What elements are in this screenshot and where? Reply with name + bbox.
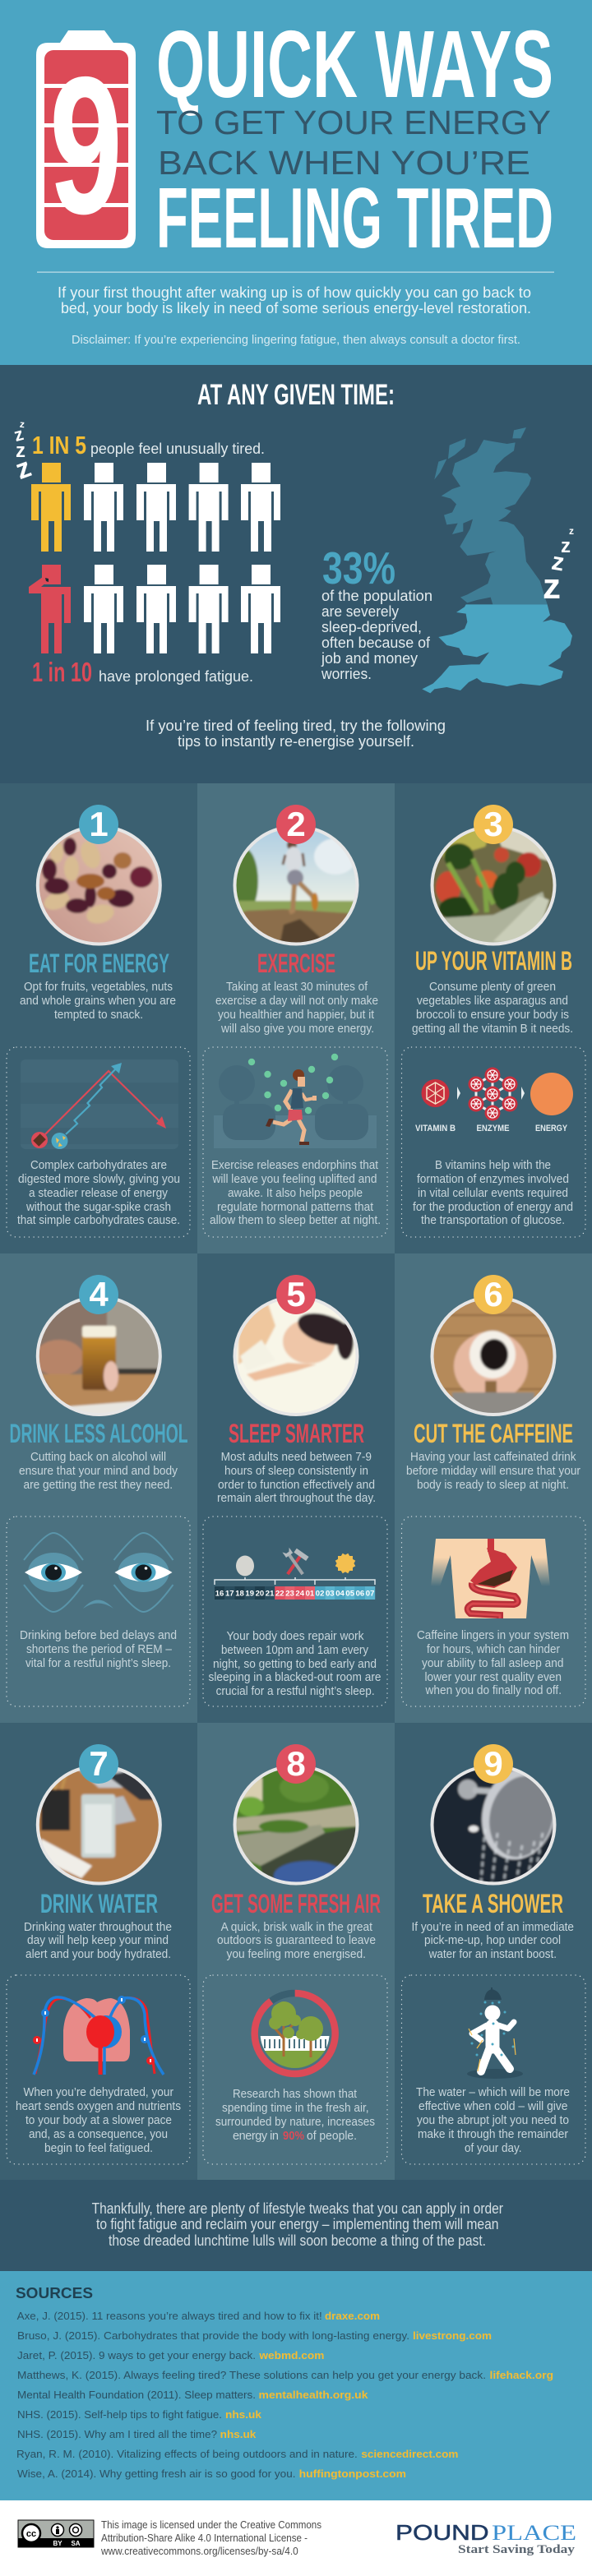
text: 33 percent: of the population — [321, 588, 432, 604]
photo: runner on a path — [237, 831, 355, 942]
text: explanation: begin to feel fatigued. — [44, 2142, 153, 2155]
panel: nature statistic box — [203, 1975, 387, 2164]
photo: glass of beer — [39, 1301, 159, 1413]
text: explanation: allow them to sleep better at night. — [210, 1214, 381, 1227]
map: United Kingdom — [422, 427, 572, 693]
text: description: Cutting back on alcohol will — [30, 1451, 166, 1464]
panel: cold water box — [401, 1975, 585, 2164]
panel: footer — [0, 2500, 592, 2576]
heading: SOURCES — [16, 2285, 93, 2301]
text: explanation: of your day. — [465, 2142, 521, 2155]
badge: 3 — [474, 805, 513, 844]
text: description — [20, 981, 176, 1022]
text: explanation — [209, 1630, 382, 1698]
badge: 6 — [474, 1275, 513, 1314]
text: explanation: when you do finally nod off. — [425, 1684, 562, 1697]
chart: sleep hours timeline: 18 — [235, 1590, 244, 1598]
icon: sleeping zzz map: z — [543, 566, 561, 607]
diagram: vitamin b enzyme energy — [415, 1067, 573, 1133]
text: description: and whole grains when you are — [20, 995, 176, 1008]
text: explanation: for hours, which can hinder — [427, 1643, 560, 1656]
badge: 4: 4 — [89, 1275, 109, 1313]
text: explanation — [16, 2086, 181, 2155]
panel: caffeine digestion box — [401, 1517, 585, 1706]
text: explanation: Drinking before bed delays and — [20, 1629, 177, 1642]
text: explanation: lower your rest quality even — [424, 1671, 562, 1684]
text: disclaimer: Disclaimer: If you’re experiencing lingering fatigue, then always consult a doctor first. — [72, 333, 520, 347]
text: explanation — [416, 2086, 570, 2155]
chart: sleep hours timeline: 20 — [256, 1590, 264, 1598]
chart: sleep hours timeline: 21 — [266, 1590, 275, 1598]
icon: sleeping zzz left: z — [19, 418, 25, 430]
text: source list: nhs.uk — [220, 2428, 257, 2440]
heading: SLEEP SMARTER — [229, 1419, 364, 1448]
text: licence: www.creativecommons.org/licenses/by-sa/4.0 — [100, 2546, 298, 2557]
text: source list: lifehack.org — [490, 2369, 553, 2381]
photo: glass of water on a desk — [39, 1770, 159, 1882]
text: description: pick-me-up, hop under cool — [424, 1934, 561, 1947]
panel: sleep timeline box — [203, 1517, 387, 1706]
chart: sleep hours timeline: 01 — [306, 1590, 315, 1598]
text: explanation: Caffeine lingers in your system — [417, 1629, 569, 1642]
text: explanation: Research has shown that — [233, 2088, 357, 2101]
text: description: alert and your body hydrated. — [25, 1948, 171, 1961]
text: explanation: sleeping in a blacked-out room are — [209, 1671, 382, 1684]
photo: woman sleeping — [237, 1302, 355, 1413]
text: source list: livestrong.com — [413, 2329, 492, 2342]
text: explanation: heart sends oxygen and nutrients — [16, 2100, 181, 2113]
text: description: order to function effectively and — [218, 1479, 375, 1492]
badge: 7: 7 — [89, 1744, 109, 1783]
text: explanation: your ability to fall asleep and — [422, 1657, 564, 1670]
title: TO GET YOUR ENERGY — [156, 104, 551, 141]
text: explanation: of people. — [307, 2130, 357, 2143]
icon: sleeping zzz left: z — [12, 451, 35, 486]
text: introduction: If your first thought after waking up is of how quickly you can go back to — [58, 284, 531, 301]
icon: battery with number 9: 9 — [49, 37, 123, 255]
text: description — [215, 981, 378, 1036]
title: BACK WHEN YOU’RE — [158, 144, 530, 182]
text: explanation: spending time in the fresh air, — [222, 2102, 369, 2115]
logo: poundplace: POUND — [395, 2520, 489, 2545]
chart: sleep hours timeline: 22 — [275, 1590, 284, 1598]
title — [156, 11, 553, 266]
text: source list: Wise, A. (2014). Why getting fresh air is so good for you. — [17, 2468, 296, 2480]
text: explanation: vital for a restful night’s sleep. — [25, 1657, 171, 1670]
panel: tip 3 vitamin b — [395, 783, 592, 1253]
icon: sleeping zzz map — [543, 525, 574, 607]
icon: shivering man in shower — [467, 1987, 523, 2079]
text: explanation: When you’re dehydrated, your — [23, 2086, 173, 2099]
text: description — [19, 1451, 178, 1492]
panel: tip 7 drink water — [0, 1723, 197, 2180]
text: explanation: will leave you feeling uplifted and — [212, 1173, 377, 1186]
icon: battery with number 9 — [36, 30, 136, 255]
heading: EAT FOR ENERGY — [29, 949, 169, 978]
text: source list: draxe.com — [325, 2310, 380, 2322]
text: explanation — [417, 1629, 569, 1697]
text: description: water for an instant boost. — [428, 1948, 557, 1961]
panel: tip 2 exercise — [197, 783, 395, 1253]
text: 33 percent: sleep-deprived, — [321, 619, 422, 635]
chart: sleep hours timeline: 23 — [285, 1590, 294, 1598]
panel: endorphins box — [203, 1047, 387, 1237]
heading: DRINK WATER — [40, 1889, 158, 1918]
text: explanation: effective when cold – will give — [419, 2100, 567, 2113]
icon: sleeping zzz left — [12, 418, 35, 486]
text: closing paragraph — [92, 2200, 503, 2249]
text: description — [217, 1451, 376, 1505]
icon: sleeping zzz left: z — [16, 440, 25, 462]
chart: sleep hours timeline — [215, 1548, 375, 1600]
text: explanation: for the production of energy and — [413, 1201, 573, 1214]
logo: poundplace: PLACE — [492, 2521, 576, 2545]
chart: sugar spike versus steady energy — [21, 1059, 178, 1149]
text: description: before midday will ensure that your — [406, 1465, 580, 1478]
chart: ninety percent donut with trees — [255, 1993, 335, 2075]
text: description: are getting the rest they need. — [23, 1479, 173, 1492]
text: description — [217, 1921, 376, 1961]
text: 1 in 10: have prolonged fatigue. — [99, 668, 253, 685]
text: description: body is ready to sleep at night. — [417, 1479, 569, 1492]
panel: tip 1 eat for energy — [0, 783, 197, 1253]
text: source list: Bruso, J. (2015). Carbohydrates that provide the body with long-lasting energy. — [17, 2329, 409, 2342]
text: source list: Axe, J. (2015). 11 reasons you’re always tired and how to fix it! — [17, 2310, 322, 2322]
text: description: remain alert throughout the day. — [217, 1492, 376, 1505]
text: explanation: make it through the remainder — [418, 2128, 568, 2141]
text: description: Taking at least 30 minutes of — [226, 981, 368, 994]
text: tips intro — [146, 718, 446, 750]
text: explanation: a steadier release of energy — [29, 1187, 169, 1200]
text: description: day will help keep your mind — [27, 1934, 169, 1947]
text: description: hours of sleep consistently in — [224, 1465, 368, 1478]
text: source list: Matthews, K. (2015). Always feeling tired? These solutions can help you get your energy back. — [17, 2369, 486, 2381]
badge: 4 — [79, 1275, 118, 1314]
photo: vegetable salad bowl — [434, 831, 553, 942]
badge: 6: 6 — [483, 1275, 503, 1313]
badge: 5: 5 — [286, 1275, 306, 1313]
text: description: Most adults need between 7-9 — [221, 1451, 372, 1464]
text: 1 in 5: 1 IN 5 — [32, 431, 86, 459]
text: introduction — [58, 284, 531, 316]
text: description: tempted to snack. — [54, 1009, 143, 1022]
text: explanation: The water – which will be more — [416, 2086, 570, 2099]
badge: 8 — [276, 1744, 316, 1784]
text: explanation: Exercise releases endorphins that — [211, 1159, 378, 1172]
chart: sleep hours timeline: 03 — [326, 1590, 335, 1598]
photo: nuts and dried fruit — [39, 830, 159, 942]
panel: sources — [0, 2271, 592, 2500]
diagram: vitamin b enzyme energy: ENERGY — [535, 1124, 568, 1133]
text: source list — [16, 2310, 553, 2480]
text: description — [411, 1921, 574, 1961]
text: explanation: to your body at a slower pace — [25, 2114, 172, 2127]
text: explanation: that simple carbohydrates cause. — [17, 1214, 180, 1227]
text: introduction: bed, your body is likely in need of some serious energy-level restoration. — [61, 300, 531, 316]
badge: 8: 8 — [286, 1744, 306, 1783]
text: explanation: the transportation of glucose. — [421, 1214, 565, 1227]
heading: DRINK LESS ALCOHOL — [10, 1419, 188, 1448]
text: closing paragraph: Thankfully, there are plenty of lifestyle tweaks that you can apply in order — [92, 2200, 503, 2217]
chart: sleep hours timeline: 06 — [356, 1590, 364, 1598]
icon: stomach and intestines — [431, 1539, 550, 1618]
text: description — [412, 981, 573, 1036]
icon: creative commons badge: SA — [71, 2540, 81, 2547]
icon: sleeping zzz map: z — [549, 548, 567, 577]
heading: EXERCISE — [257, 949, 335, 978]
badge: 7 — [79, 1744, 118, 1784]
diagram: vitamin b enzyme energy: ENZYME — [477, 1124, 510, 1133]
text: description: Opt for fruits, vegetables, nuts — [24, 981, 173, 994]
text: description: If you’re in need of an immediate — [411, 1921, 574, 1934]
panel: tip 5 sleep smarter — [197, 1253, 395, 1723]
text: closing paragraph: those dreaded lunchtime lulls will soon become a thing of the past. — [109, 2232, 486, 2249]
badge: 2: 2 — [286, 805, 306, 843]
chart: people row one in ten — [29, 565, 280, 653]
text: explanation — [413, 1159, 573, 1227]
chart: people row one in five — [31, 463, 280, 552]
panel: tip 9 take a shower — [395, 1723, 592, 2180]
chart: sleep hours timeline: 19 — [245, 1590, 254, 1598]
text: explanation — [17, 1159, 180, 1227]
icon: sleeping zzz left: z — [12, 423, 25, 445]
panel: alcohol and sleep box — [7, 1517, 190, 1706]
logo: poundplace: Start Saving Today — [458, 2543, 576, 2556]
text: tips intro: tips to instantly re-energise yourself. — [178, 733, 414, 750]
icon: sleeping zzz map: z — [561, 535, 571, 557]
badge: 9 — [474, 1744, 513, 1784]
text: explanation — [210, 1159, 381, 1227]
badge: 1 — [79, 805, 118, 844]
text: source list: sciencedirect.com — [361, 2448, 458, 2460]
text: source list: huffingtonpost.com — [299, 2468, 406, 2480]
chart: sleep hours timeline: 05 — [345, 1590, 355, 1598]
text: 33 percent: often because of — [321, 635, 431, 651]
text: source list: NHS. (2015). Self-help tips to fight fatigue. — [17, 2408, 222, 2421]
text: source list: webmd.com — [258, 2349, 324, 2361]
text: source list: NHS. (2015). Why am I tired all the time? — [17, 2428, 217, 2440]
logo: poundplace — [395, 2520, 576, 2556]
panel: vitamin to energy box — [401, 1047, 585, 1237]
icon: runner with endorphins — [214, 1054, 377, 1148]
text: explanation — [215, 2088, 375, 2143]
text: source list: nhs.uk — [225, 2408, 262, 2421]
chart: sleep hours timeline: 07 — [366, 1590, 374, 1598]
heading: AT ANY GIVEN TIME: — [197, 379, 395, 411]
text: explanation: awake. It also helps people — [228, 1187, 363, 1200]
icon: creative commons badge: BY — [53, 2540, 62, 2547]
badge: 1: 1 — [89, 805, 109, 843]
text: 33 percent: are severely — [321, 603, 399, 620]
text: description: you feeling more energised. — [227, 1948, 366, 1961]
text: 1 in 5 — [32, 431, 265, 459]
text: explanation: regulate hormonal patterns that — [217, 1201, 373, 1214]
text: licence: Attribution-Share Alike 4.0 International License - — [101, 2532, 308, 2544]
chart: sleep hours timeline: 24 — [295, 1590, 305, 1598]
text: explanation: and, as a consequence, you — [29, 2128, 168, 2141]
panel: at any given time — [0, 365, 592, 783]
text: explanation: in vital cellular events required — [418, 1187, 568, 1200]
text: explanation: between 10pm and 1am every — [221, 1644, 369, 1657]
panel: dehydration box — [7, 1975, 190, 2164]
text: 1 in 10 — [32, 657, 253, 687]
text: description: exercise a day will not only make — [215, 995, 378, 1008]
text: explanation: surrounded by nature, increases — [215, 2116, 375, 2129]
icon: creative commons badge — [18, 2520, 94, 2547]
text: 33 percent: 33% — [322, 542, 395, 593]
text: explanation: formation of enzymes involved — [417, 1173, 569, 1186]
text: description: broccoli to ensure your body is — [416, 1009, 569, 1022]
panel: header — [0, 0, 592, 365]
chart: sleep hours timeline: 16 — [215, 1590, 224, 1598]
text: description: A quick, brisk walk in the great — [221, 1921, 372, 1934]
text: 33 percent — [321, 542, 432, 682]
chart: sleep hours timeline: 02 — [316, 1590, 324, 1598]
icon: tired eyes — [16, 1533, 181, 1612]
text: explanation: B vitamins help with the — [435, 1159, 551, 1172]
text: source list: Ryan, R. M. (2010). Vitalizing effects of being outdoors and in nature. — [16, 2448, 358, 2460]
text: licence — [100, 2519, 321, 2557]
badge: 3: 3 — [483, 805, 503, 843]
badge: 9: 9 — [483, 1744, 503, 1783]
text: 33 percent: job and money — [321, 650, 418, 667]
photo: hands holding coffee — [434, 1302, 553, 1413]
badge: 5 — [276, 1275, 316, 1314]
photo: river and green countryside — [237, 1770, 355, 1882]
text: explanation: 90% — [283, 2130, 304, 2143]
text: explanation: Complex carbohydrates are — [30, 1159, 167, 1172]
panel: tip 6 cut the caffeine — [395, 1253, 592, 1723]
text: description: vegetables like asparagus and — [417, 995, 568, 1008]
icon: heart and lungs — [33, 1996, 164, 2075]
chart: sleep hours timeline: 17 — [225, 1590, 234, 1598]
text: description: Having your last caffeinated drink — [410, 1451, 576, 1464]
text: source list: Mental Health Foundation (2011). Sleep matters. — [17, 2389, 256, 2401]
chart: sleep hours timeline: 04 — [335, 1590, 345, 1598]
text: description: ensure that your mind and body — [19, 1465, 178, 1478]
text: tips intro: If you’re tired of feeling tired, try the following — [146, 718, 446, 734]
text: description: outdoors is guaranteed to leave — [217, 1934, 376, 1947]
text: description: getting all the vitamin B it needs. — [412, 1023, 573, 1036]
text: licence: This image is licensed under the Creative Commons — [101, 2519, 321, 2531]
badge: 2 — [276, 805, 316, 844]
text: description: will also give you more energy. — [220, 1023, 374, 1036]
text: 33 percent: worries. — [321, 666, 372, 682]
text: explanation — [20, 1629, 177, 1670]
panel: energy release box — [7, 1047, 190, 1237]
text: explanation: digested more slowly, giving you — [18, 1173, 180, 1186]
text: description — [406, 1451, 580, 1492]
text: closing paragraph: to fight fatigue and reclaim your energy – implementing them will mean — [96, 2216, 498, 2232]
text: explanation: Your body does repair work — [227, 1630, 364, 1643]
text: source list: mentalhealth.org.uk — [258, 2389, 368, 2401]
panel: tip 8 get some fresh air — [197, 1723, 395, 2180]
diagram: vitamin b enzyme energy: VITAMIN B — [415, 1124, 456, 1133]
text: explanation: without the sugar-spike crash — [25, 1201, 171, 1214]
heading: GET SOME FRESH AIR — [211, 1889, 381, 1918]
text: description: Drinking water throughout the — [24, 1921, 172, 1934]
text: 1 in 5: people feel unusually tired. — [90, 441, 265, 457]
text: explanation: night, so getting to bed early and — [213, 1658, 377, 1671]
photo: running shower head — [434, 1770, 553, 1882]
text: explanation: energy in — [233, 2130, 279, 2143]
panel: tip 4 drink less alcohol — [0, 1253, 197, 1723]
icon: creative commons badge: cc — [26, 2529, 36, 2539]
text: source list: Jaret, P. (2015). 9 ways to get your energy back. — [17, 2349, 256, 2361]
text: description: Consume plenty of green — [429, 981, 556, 994]
text: explanation: crucial for a restful night’s sleep. — [216, 1685, 375, 1698]
text: description: you healthier and happier, but it — [218, 1009, 374, 1022]
text: 1 in 10: 1 in 10 — [32, 657, 92, 687]
text: explanation: you the abrupt jolt you need to — [417, 2114, 569, 2127]
text: description — [24, 1921, 172, 1961]
text: explanation: shortens the period of REM – — [26, 1643, 173, 1656]
icon: sleeping zzz map: z — [569, 525, 574, 537]
